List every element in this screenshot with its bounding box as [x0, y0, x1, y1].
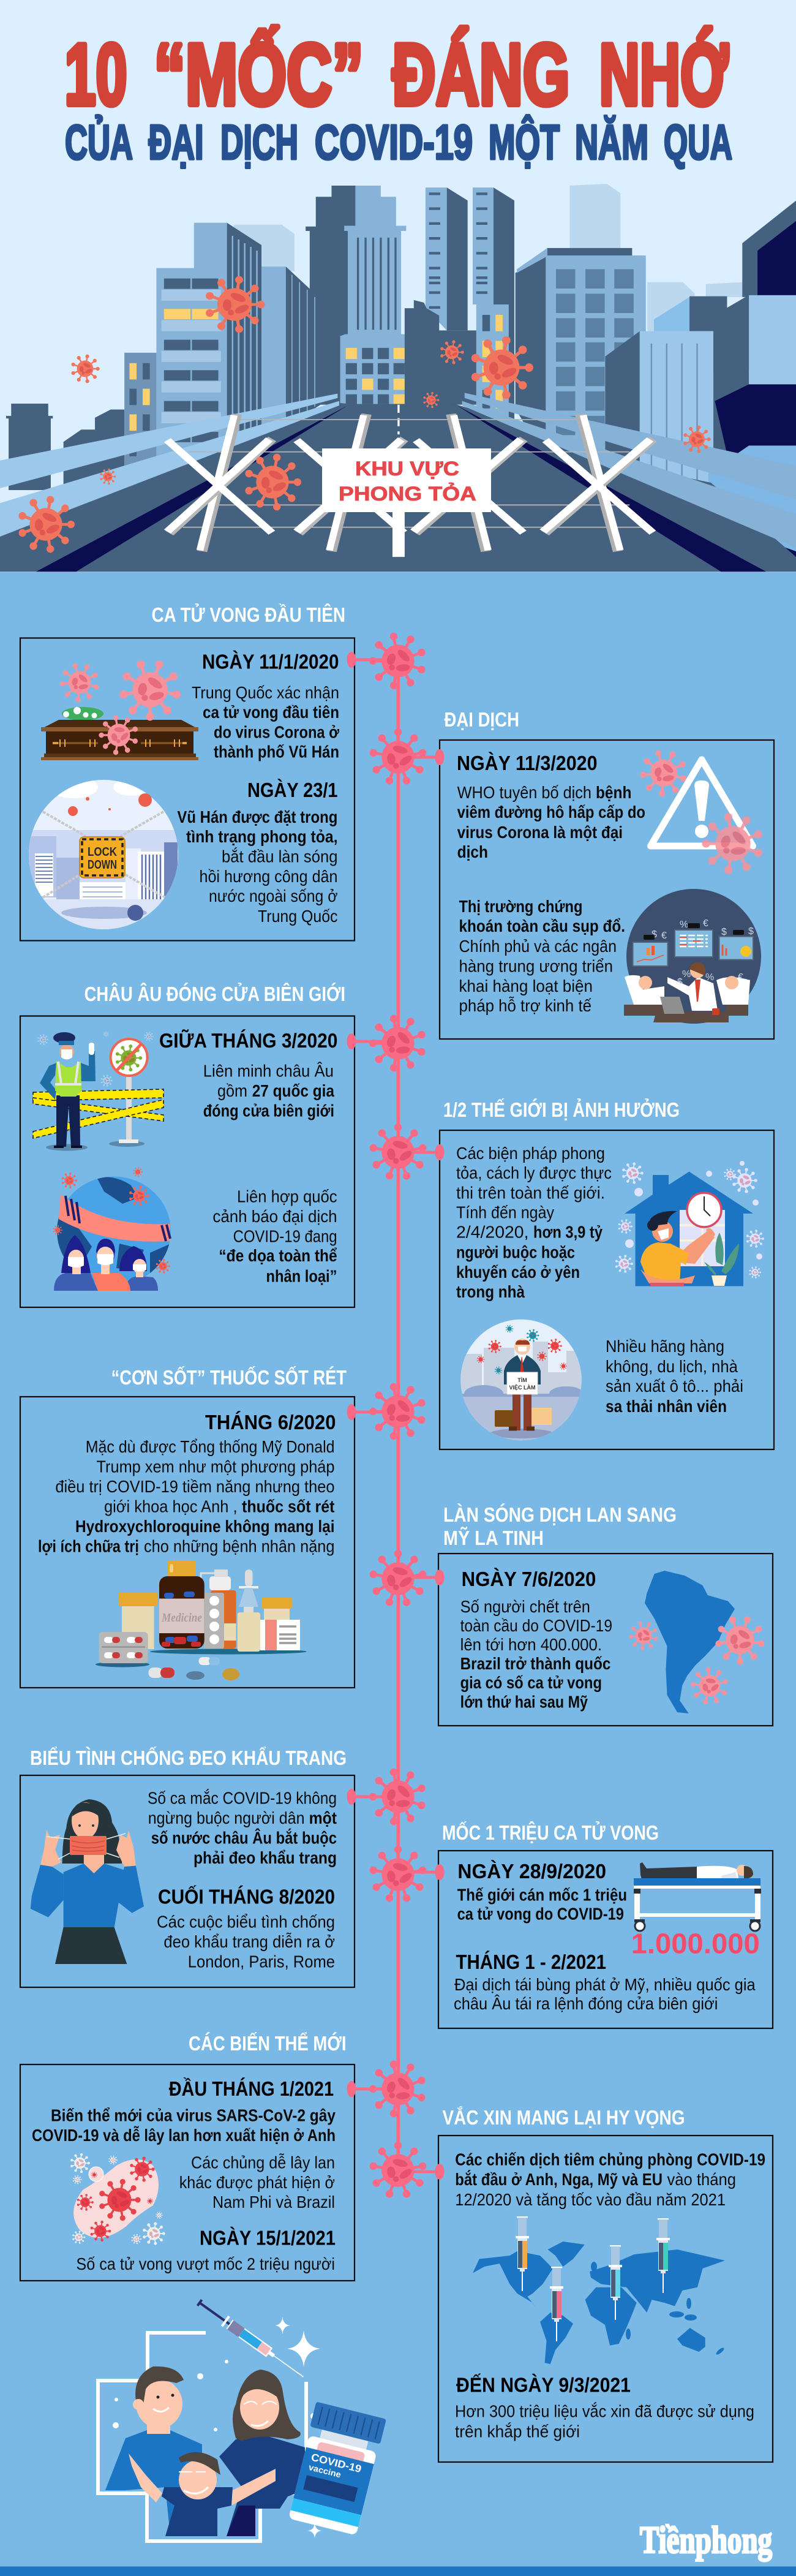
panel: làn sóng dịch lan sang mỹ la tinh: [438, 1503, 773, 1726]
illustration: stock market crash traders: €: [703, 918, 708, 929]
panel: ca tử vong đầu tiên: NGÀY 23/1: [247, 779, 338, 801]
panel: biểu tình chống đeo khẩu trang: phải đeo khẩu trang: [193, 1848, 337, 1867]
illustration: stock market crash traders: $: [651, 929, 657, 940]
panel: châu âu đóng cửa biên giới: CHÂU ÂU ĐÓNG CỬA BIÊN GIỚI: [84, 983, 345, 1005]
panel: làn sóng dịch lan sang mỹ la tinh: toàn cầu do COVID-19: [460, 1616, 612, 1635]
illustration: person on stretcher: [634, 1862, 761, 1931]
panel: châu âu đóng cửa biên giới: “đe dọa toàn thể: [219, 1246, 337, 1265]
subtitle: NĂM: [575, 115, 648, 169]
illustration: stock market crash traders: [624, 889, 761, 1024]
panel: đại dịch: virus Corona là một đại: [457, 823, 623, 842]
icon: covid-19 vaccine bottle: COVID-19: [310, 2451, 362, 2475]
title: “MỐC”: [154, 26, 364, 124]
illustration: medicine bottles and pills: [96, 1560, 307, 1680]
panel: ca tử vong đầu tiên: [20, 603, 355, 941]
panel: châu âu đóng cửa biên giới: cảnh báo đại dịch: [212, 1207, 337, 1226]
panel: 1/2 thế giới bị ảnh hưởng: Tính đến ngày: [456, 1203, 554, 1222]
panel: làn sóng dịch lan sang mỹ la tinh: Số người chết trên: [460, 1597, 590, 1616]
panel: các biến thể mới: khác được phát hiện ở: [179, 2173, 335, 2192]
panel: 1/2 thế giới bị ảnh hưởng: không, du lịch, nhà: [606, 1357, 738, 1376]
panel: làn sóng dịch lan sang mỹ la tinh: MỸ LA TINH: [443, 1527, 544, 1549]
panel: ca tử vong đầu tiên: Trung Quốc xác nhận: [192, 683, 339, 702]
panel: châu âu đóng cửa biên giới: Liên minh châu Âu: [203, 1062, 334, 1081]
panel: mốc 1 triệu ca tử vong: châu Âu tái ra lệnh đóng cửa biên giới: [454, 1994, 718, 2013]
panel: vắc xin mang lại hy vọng: vào tháng: [667, 2170, 736, 2189]
panel: làn sóng dịch lan sang mỹ la tinh: lên tới hơn 400.000.: [460, 1635, 602, 1654]
panel: làn sóng dịch lan sang mỹ la tinh: gia có số ca tử vong: [460, 1673, 602, 1692]
sign: khu vực phong tỏa: KHU VỰC: [355, 458, 459, 480]
panel: làn sóng dịch lan sang mỹ la tinh: NGÀY 7/6/2020: [462, 1568, 596, 1590]
panel: biểu tình chống đeo khẩu trang: Các cuộc biểu tình chống: [157, 1913, 335, 1931]
panel: đại dịch: khai hàng loạt biện: [459, 976, 593, 995]
panel: các biến thể mới: NGÀY 15/1/2021: [200, 2227, 336, 2249]
panel: 1/2 thế giới bị ảnh hưởng: 2/4/2020,: [456, 1223, 529, 1242]
panel: mốc 1 triệu ca tử vong: THÁNG 1 - 2/2021: [456, 1951, 606, 1973]
illustration: stock market crash traders: $: [721, 927, 727, 937]
panel: ca tử vong đầu tiên: do virus Corona ở: [214, 723, 339, 741]
panel: cơn sốt thuốc sốt rét: điều trị COVID-19 tiềm năng nhưng theo: [55, 1477, 335, 1496]
panel: các biến thể mới: [20, 2032, 355, 2281]
subtitle: ĐẠI: [148, 115, 203, 169]
illustration: coffin with viruses: [41, 655, 198, 760]
illustration: stock market crash traders: %: [705, 972, 714, 983]
illustration: stock market crash traders: $: [748, 926, 754, 937]
illustration: stock market crash traders: €: [661, 931, 667, 941]
panel: các biến thể mới: CÁC BIẾN THỂ MỚI: [189, 2032, 347, 2055]
panel: làn sóng dịch lan sang mỹ la tinh: Brazil trở thành quốc: [460, 1654, 610, 1673]
illustration: jobless man circle: TÌM: [517, 1377, 527, 1383]
illustration: world map with syringes: [473, 2216, 725, 2364]
icon: sparkles: [275, 2317, 321, 2538]
panel: 1/2 thế giới bị ảnh hưởng: Nhiều hãng hàng: [606, 1337, 724, 1356]
panel: biểu tình chống đeo khẩu trang: CUỐI THÁNG 8/2020: [158, 1885, 335, 1908]
sign: khu vực phong tỏa: PHONG TỎA: [339, 483, 476, 505]
panel: vắc xin mang lại hy vọng: [438, 2106, 773, 2462]
icon: covid-19 vaccine bottle: vaccine: [307, 2462, 342, 2480]
panel: ca tử vong đầu tiên: Vũ Hán được đặt trong: [177, 807, 337, 826]
panel: châu âu đóng cửa biên giới: GIỮA THÁNG 3/2020: [159, 1029, 337, 1052]
panel: mốc 1 triệu ca tử vong: ca tử vong do COVID-19: [457, 1905, 624, 1924]
panel: 1/2 thế giới bị ảnh hưởng: [440, 1098, 774, 1449]
panel: 1/2 thế giới bị ảnh hưởng: thi trên toàn thế giới.: [456, 1184, 605, 1202]
footer band: [0, 2567, 796, 2576]
panel: cơn sốt thuốc sốt rét: Mặc dù được Tổng thống Mỹ Donald: [86, 1437, 334, 1456]
subtitle: COVID-19: [315, 115, 473, 169]
panel: mốc 1 triệu ca tử vong: 1.000.000: [631, 1928, 760, 1960]
panel: ca tử vong đầu tiên: ca tử vong đầu tiên: [203, 703, 339, 722]
panel: đại dịch: pháp hỗ trợ kinh tế: [459, 996, 591, 1015]
panel: châu âu đóng cửa biên giới: Liên hợp quốc: [237, 1187, 337, 1206]
panel: biểu tình chống đeo khẩu trang: số nước châu Âu bắt buộc: [151, 1828, 337, 1847]
panel: vắc xin mang lại hy vọng: ĐẾN NGÀY 9/3/2021: [456, 2374, 631, 2397]
panel: đại dịch: Chính phủ và các ngân: [459, 937, 617, 956]
panel: châu âu đóng cửa biên giới: 27 quốc gia: [252, 1081, 335, 1100]
hero illustration: locked down city: [0, 0, 796, 572]
panel: đại dịch: NGÀY 11/3/2020: [457, 752, 598, 774]
panel: châu âu đóng cửa biên giới: gồm: [217, 1081, 247, 1100]
title: [65, 26, 729, 124]
timeline with virus markers: [347, 625, 445, 2203]
illustration: lockdown city circle: [29, 776, 182, 936]
panel: 1/2 thế giới bị ảnh hưởng: sản xuất ô tô... phải: [606, 1377, 743, 1396]
panel: mốc 1 triệu ca tử vong: Thế giới cán mốc 1 triệu: [457, 1886, 627, 1904]
title: 10: [65, 26, 127, 124]
panel: các biến thể mới: Các chủng dễ lây lan: [191, 2153, 335, 2172]
panel: 1/2 thế giới bị ảnh hưởng: sa thải nhân viên: [606, 1397, 727, 1416]
panel: 1/2 thế giới bị ảnh hưởng: Các biện pháp phong: [456, 1144, 605, 1163]
illustration: stock market crash traders: €: [738, 972, 743, 983]
panel: làn sóng dịch lan sang mỹ la tinh: lớn thứ hai sau Mỹ: [460, 1692, 588, 1711]
panel: làn sóng dịch lan sang mỹ la tinh: LÀN SÓNG DỊCH LAN SANG: [443, 1503, 677, 1526]
illustration: border guard with sign and tape: [33, 1032, 163, 1150]
subtitle: DỊCH: [220, 115, 298, 169]
panel: vắc xin mang lại hy vọng: bắt đầu ở Anh, Nga, Mỹ và EU: [455, 2170, 663, 2189]
subtitle: CỦA: [65, 115, 133, 169]
panel: đại dịch: Thị trường chứng: [459, 897, 582, 916]
panel: mốc 1 triệu ca tử vong: NGÀY 28/9/2020: [457, 1860, 606, 1883]
panel: đại dịch: [440, 708, 774, 1039]
illustration: lockdown city circle: LOCK: [88, 845, 117, 859]
panel: châu âu đóng cửa biên giới: [20, 983, 355, 1307]
panel: ca tử vong đầu tiên: nước ngoài sống ở: [209, 886, 338, 905]
illustration: woman with mask: [31, 1799, 144, 1964]
illustration: jobless man circle: [460, 1320, 585, 1446]
panel: vắc xin mang lại hy vọng: trên khắp thế giới: [455, 2422, 580, 2441]
panel: biểu tình chống đeo khẩu trang: đeo khẩu trang diễn ra ở: [163, 1932, 335, 1951]
panel: biểu tình chống đeo khẩu trang: ngừng buộc người dân: [148, 1808, 305, 1827]
panel: biểu tình chống đeo khẩu trang: một: [309, 1808, 337, 1827]
panel: cơn sốt thuốc sốt rét: THÁNG 6/2020: [205, 1411, 336, 1433]
panel: đại dịch: dịch: [457, 842, 488, 861]
panel: ca tử vong đầu tiên: CA TỬ VONG ĐẦU TIÊN: [152, 603, 345, 626]
panel: ca tử vong đầu tiên: tình trạng phong tỏa,: [186, 827, 338, 846]
panel: 1/2 thế giới bị ảnh hưởng: khuyến cáo ở yên: [456, 1263, 580, 1282]
illustration: globe with ribbon and masked people: [53, 1167, 171, 1291]
panel: các biến thể mới: Nam Phi và Brazil: [212, 2193, 335, 2212]
illustration: stock market crash traders: $: [677, 977, 683, 988]
illustration: lockdown city circle: DOWN: [88, 858, 117, 872]
panel: vắc xin mang lại hy vọng: VẮC XIN MANG LẠI HY VỌNG: [442, 2106, 685, 2129]
panel: 1/2 thế giới bị ảnh hưởng: trong nhà: [456, 1282, 525, 1301]
illustration: stock market crash traders: %: [682, 969, 691, 980]
panel: biểu tình chống đeo khẩu trang: BIỂU TÌNH CHỐNG ĐEO KHẨU TRANG: [30, 1746, 347, 1769]
panel: đại dịch: WHO tuyên bố dịch: [457, 783, 591, 802]
panel: các biến thể mới: Số ca tử vong vượt mốc 2 triệu người: [76, 2254, 335, 2273]
illustration: south america map with viruses: [626, 1571, 768, 1713]
panel: đại dịch: khoán toàn cầu sụp đổ.: [459, 916, 625, 935]
panel: cơn sốt thuốc sốt rét: giới khoa học Anh ,: [104, 1497, 238, 1516]
panel: cơn sốt thuốc sốt rét: Hydroxychloroquine không mang lại: [75, 1517, 334, 1536]
illustration: stock market crash traders: %: [680, 920, 688, 930]
panel: 1/2 thế giới bị ảnh hưởng: tỏa, cách ly được thực: [456, 1163, 612, 1182]
panel: 1/2 thế giới bị ảnh hưởng: 1/2 THẾ GIỚI BỊ ẢNH HƯỞNG: [443, 1098, 680, 1121]
panel: các biến thể mới: ĐẦU THÁNG 1/2021: [169, 2077, 334, 2100]
panel: biểu tình chống đeo khẩu trang: [20, 1746, 355, 1987]
panel: châu âu đóng cửa biên giới: nhân loại”: [266, 1267, 337, 1285]
illustration: virus cells: [70, 2153, 165, 2245]
panel: các biến thể mới: COVID-19 và dễ lây lan hơn xuất hiện ở Anh: [32, 2126, 336, 2145]
illustration: medicine bottles and pills: Medicine: [161, 1611, 202, 1625]
panel: đại dịch: hàng trung ương triển: [459, 957, 613, 976]
panel: mốc 1 triệu ca tử vong: MỐC 1 TRIỆU CA TỬ VONG: [442, 1821, 659, 1844]
panel: đại dịch: bệnh: [596, 783, 631, 802]
panel: vắc xin mang lại hy vọng: Hơn 300 triệu liệu vắc xin đã được sử dụng: [455, 2402, 754, 2421]
panel: biểu tình chống đeo khẩu trang: Số ca mắc COVID-19 không: [148, 1789, 337, 1807]
panel: cơn sốt thuốc sốt rét: “CƠN SỐT” THUỐC SỐT RÉT: [111, 1365, 347, 1389]
panel: các biến thể mới: Biến thể mới của virus SARS-CoV-2 gây: [51, 2106, 336, 2125]
panel: cơn sốt thuốc sốt rét: lợi ích chữa trị: [38, 1537, 139, 1556]
panel: 1/2 thế giới bị ảnh hưởng: người buộc hoặc: [456, 1242, 575, 1262]
panel: ca tử vong đầu tiên: hồi hương công dân: [200, 867, 338, 886]
icon: warning triangle with viruses: [636, 745, 772, 883]
panel: biểu tình chống đeo khẩu trang: London, Paris, Rome: [188, 1952, 335, 1971]
icon: covid-19 vaccine bottle: [287, 2401, 386, 2536]
title: NHỚ: [599, 26, 729, 124]
subtitle: QUA: [664, 115, 732, 169]
panel: cơn sốt thuốc sốt rét: [20, 1365, 355, 1688]
subtitle: MỘT: [489, 115, 560, 169]
panel: đại dịch: ĐẠI DỊCH: [445, 708, 519, 731]
icon: syringe: [195, 2297, 307, 2382]
panel: cơn sốt thuốc sốt rét: thuốc sốt rét: [242, 1497, 334, 1516]
illustration: jobless man circle: VIỆC LÀM: [509, 1384, 536, 1391]
panel: cơn sốt thuốc sốt rét: Trump xem như một phương pháp: [97, 1457, 334, 1476]
panel: ca tử vong đầu tiên: Trung Quốc: [258, 907, 338, 926]
panel: ca tử vong đầu tiên: bắt đầu làn sóng: [222, 847, 338, 866]
illustration: person at home with clock: [615, 1161, 764, 1286]
panel: 1/2 thế giới bị ảnh hưởng: hơn 3,9 tỷ: [533, 1223, 603, 1242]
panel: ca tử vong đầu tiên: thành phố Vũ Hán: [214, 742, 339, 761]
panel: mốc 1 triệu ca tử vong: Đại dịch tái bùng phát ở Mỹ, nhiều quốc gia: [454, 1975, 756, 1994]
sign: khu vực phong tỏa: [322, 448, 491, 512]
panel: ca tử vong đầu tiên: NGÀY 11/1/2020: [202, 651, 339, 673]
panel: đại dịch: viêm đường hô hấp cấp do: [457, 803, 645, 822]
panel: cơn sốt thuốc sốt rét: cho những bệnh nhân nặng: [144, 1537, 334, 1556]
title: ĐÁNG: [392, 26, 569, 124]
panel: châu âu đóng cửa biên giới: đóng cửa biên giới: [203, 1101, 334, 1120]
panel: mốc 1 triệu ca tử vong: [438, 1821, 773, 2028]
illustration: vaccinated family in medical cross: [98, 2333, 317, 2541]
panel: vắc xin mang lại hy vọng: 12/2020 và tăng tốc vào đầu năm 2021: [455, 2190, 726, 2209]
subtitle: [65, 115, 732, 169]
panel: châu âu đóng cửa biên giới: COVID-19 đang: [233, 1226, 337, 1246]
